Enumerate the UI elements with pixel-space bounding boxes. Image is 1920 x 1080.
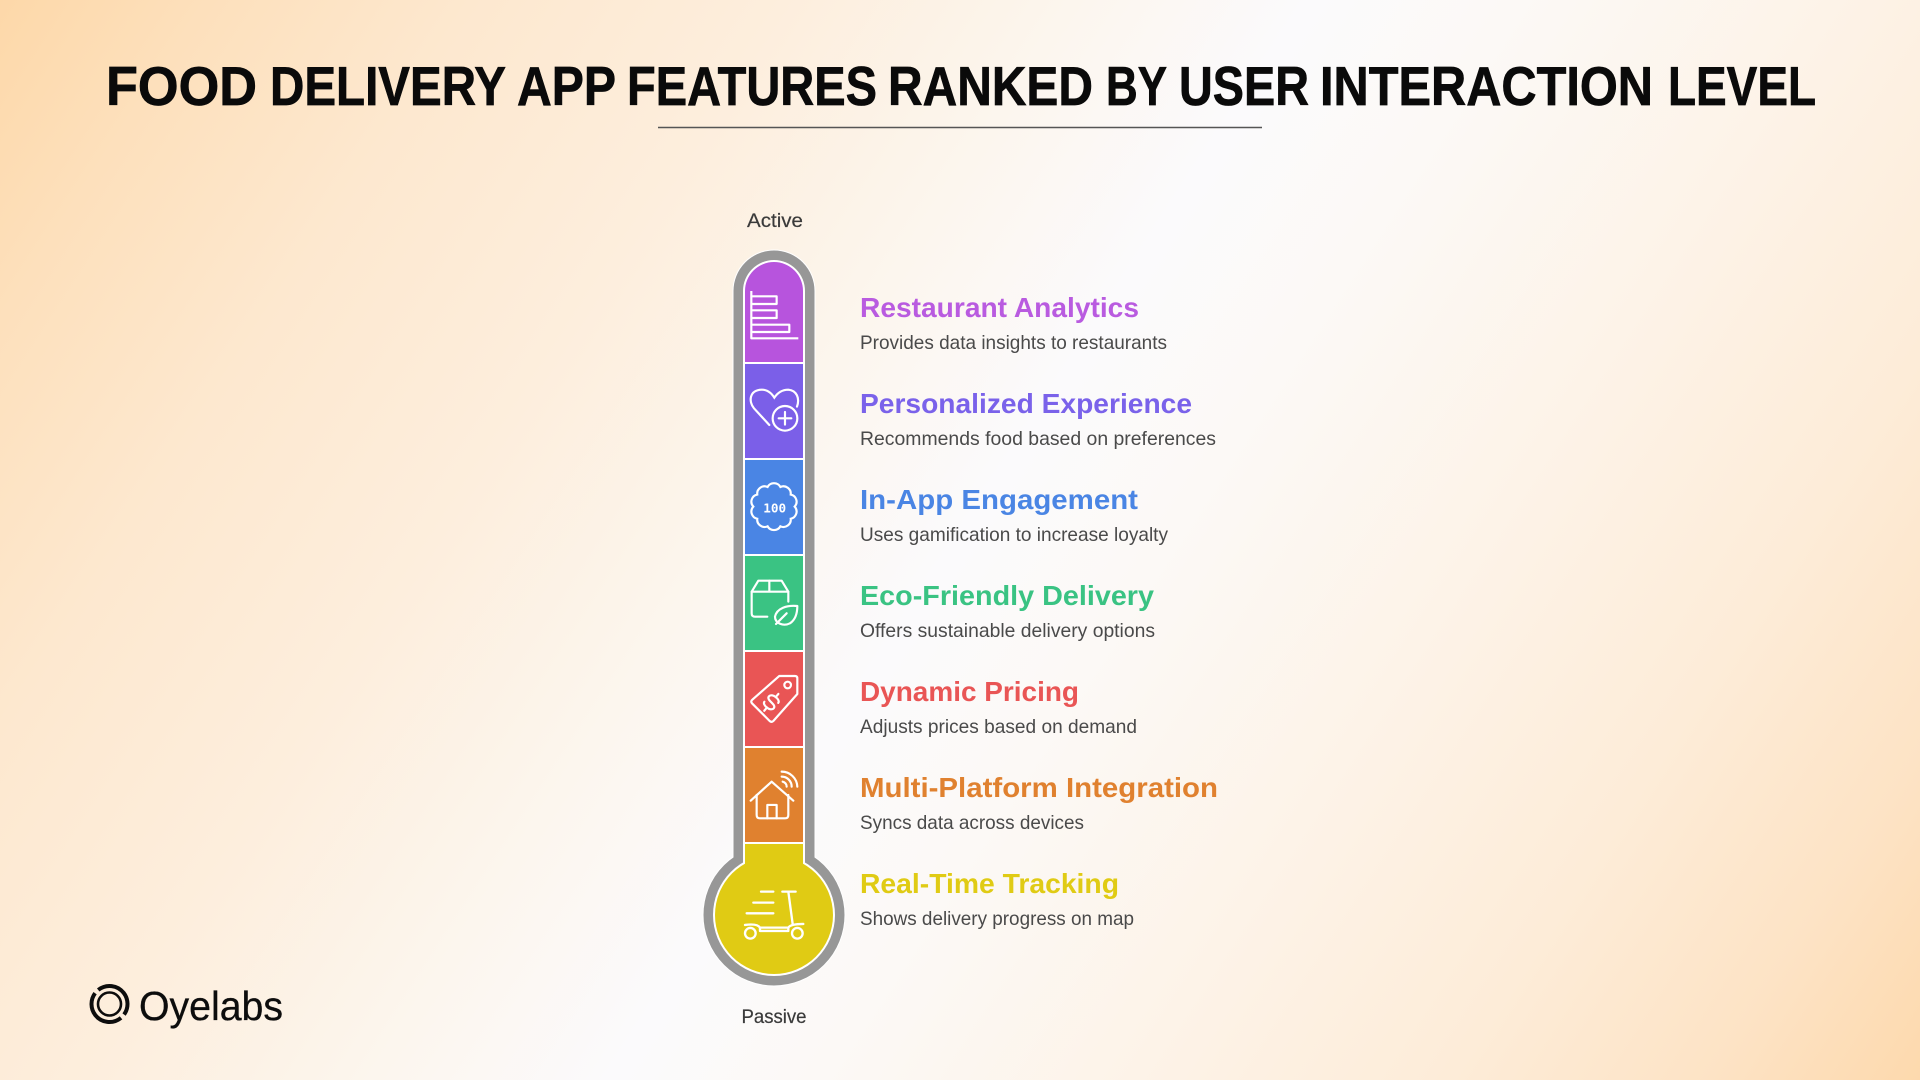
logo mark — [84, 979, 135, 1029]
title: INTERACTION — [1320, 55, 1653, 117]
title: LEVEL — [1668, 55, 1816, 117]
logo wordmark: Oyelabs — [139, 983, 283, 1029]
item: eco-friendly delivery: Eco-Friendly Delivery — [860, 580, 1154, 611]
thermometer casing — [703, 250, 845, 986]
item: dynamic pricing — [860, 676, 1137, 738]
icon: 100 badge — [751, 483, 797, 530]
item: eco-friendly delivery — [860, 580, 1155, 642]
item: in-app engagement — [860, 484, 1168, 546]
title: RANKED — [888, 55, 1093, 117]
title: FOOD — [106, 55, 257, 117]
item: in-app engagement: In-App Engagement — [860, 484, 1138, 515]
item: multi-platform integration: Multi-Platform Integration — [860, 772, 1218, 803]
title: FEATURES — [627, 55, 877, 117]
segment: real-time tracking bulb — [715, 844, 833, 974]
icon: box with leaf — [752, 581, 797, 625]
title — [106, 55, 1816, 117]
icon: heart with plus — [751, 390, 798, 431]
icon: bar chart — [751, 291, 798, 338]
item: real-time tracking: Real-Time Tracking — [860, 868, 1119, 899]
icon: delivery scooter — [745, 892, 803, 939]
icon: 100 badge: 100 — [763, 500, 786, 515]
item: eco-friendly delivery: Offers sustainable delivery options — [860, 620, 1155, 642]
label: active: Active — [747, 210, 803, 232]
title: BY — [1106, 55, 1167, 117]
item: restaurant analytics — [860, 292, 1167, 354]
item: real-time tracking — [860, 868, 1134, 930]
item: in-app engagement: Uses gamification to increase loyalty — [860, 524, 1168, 546]
title: USER — [1179, 55, 1309, 117]
item: personalized experience: Recommends food based on preferences — [860, 428, 1216, 450]
icon: smart home — [751, 772, 797, 818]
segment: restaurant analytics — [745, 262, 803, 362]
item: multi-platform integration — [860, 772, 1218, 834]
item: restaurant analytics: Provides data insights to restaurants — [860, 332, 1167, 354]
item: restaurant analytics: Restaurant Analytics — [860, 292, 1139, 323]
item: dynamic pricing: Adjusts prices based on demand — [860, 716, 1137, 738]
logo: oyelabs — [84, 979, 283, 1029]
segment: multi-platform integration — [745, 748, 803, 842]
item: real-time tracking: Shows delivery progress on map — [860, 908, 1134, 930]
item: dynamic pricing: Dynamic Pricing — [860, 676, 1079, 707]
segment: personalized experience — [745, 364, 803, 458]
segment: in-app engagement — [745, 460, 803, 554]
title: DELIVERY — [270, 55, 506, 117]
segment: dynamic pricing — [745, 652, 803, 746]
label: passive: Passive — [742, 1006, 806, 1028]
title: APP — [517, 55, 616, 117]
item: personalized experience: Personalized Experience — [860, 388, 1192, 419]
segment: eco-friendly delivery — [745, 556, 803, 650]
item: multi-platform integration: Syncs data across devices — [860, 812, 1084, 834]
icon: price tag — [751, 676, 797, 722]
thermometer inner outline — [713, 260, 835, 976]
item: personalized experience — [860, 388, 1216, 450]
thermometer — [703, 250, 845, 986]
